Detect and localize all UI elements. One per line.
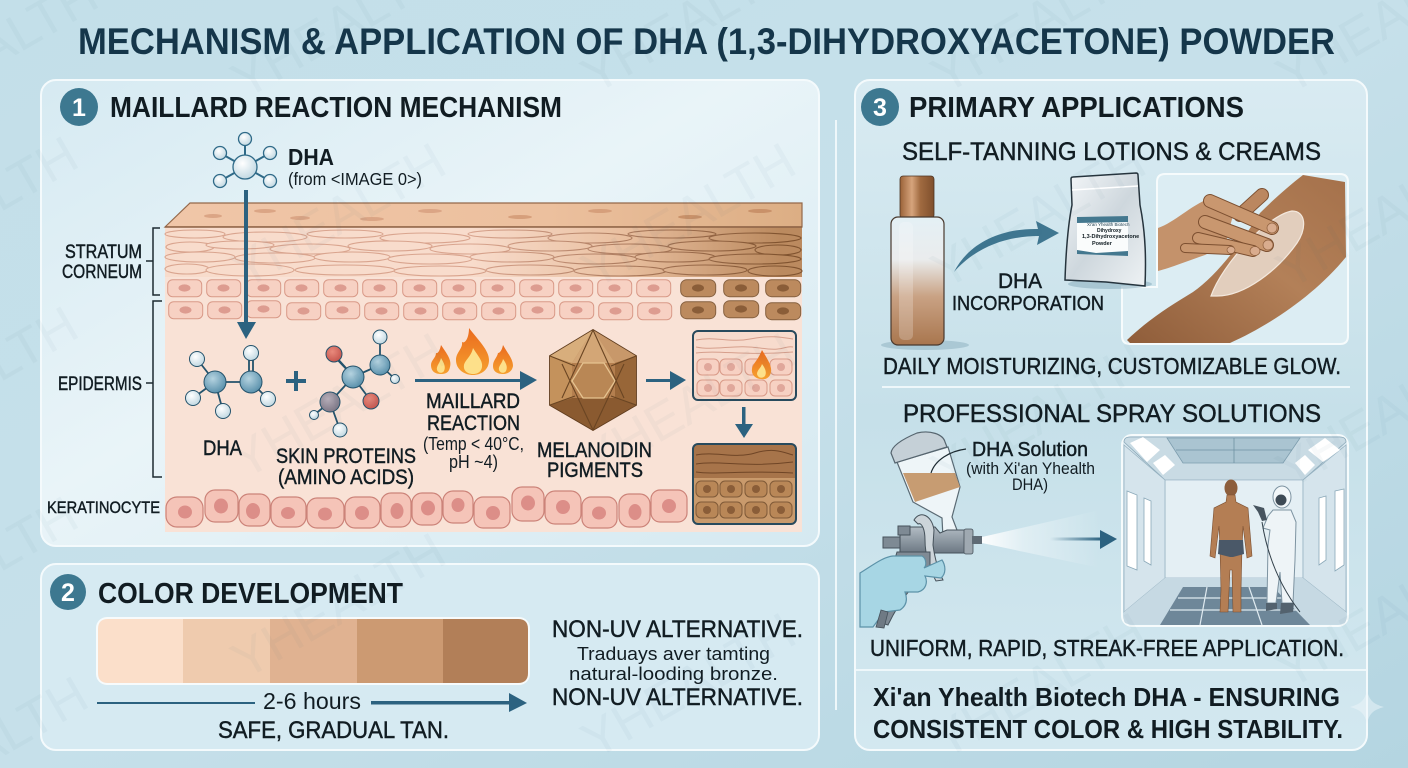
watermark pattern: YHEALTH xyxy=(572,132,805,300)
icon: sparkle xyxy=(1350,690,1384,724)
person being sprayed xyxy=(1210,480,1252,612)
label: stratum corneum with bracket: CORNEUM xyxy=(62,262,142,283)
icon: DHA molecule (top) xyxy=(214,132,276,188)
inset: tanned skin xyxy=(693,444,796,524)
icon: DHA powder pouch xyxy=(1065,173,1152,289)
leader and label: DHA solution xyxy=(931,439,1095,494)
stratum corneum layers xyxy=(165,230,802,276)
subheading: professional spray: PROFESSIONAL SPRAY SOLUTIONS xyxy=(903,400,1321,428)
caption: daily moisturizing: DAILY MOISTURIZING, CUSTOMIZABLE GLOW. xyxy=(883,353,1341,379)
plus sign xyxy=(286,371,306,391)
icon: flames xyxy=(431,328,513,375)
arrow: maillard reaction xyxy=(415,371,537,390)
heading: maillard reaction mechanism: MAILLARD REACTION MECHANISM xyxy=(110,92,562,124)
watermark pattern: YHEALTH xyxy=(572,602,805,768)
icon: DHA powder pouch: Dihydroxy xyxy=(1097,228,1122,234)
icon: DHA powder pouch: Xi'an Yhealth Biotech xyxy=(1087,222,1130,227)
inset: skin during reaction xyxy=(693,331,796,400)
watermark pattern: YHEALTH xyxy=(572,322,805,490)
arrow: spray to booth xyxy=(1050,530,1117,549)
text block: non-UV alternative: Traduays aver tamting xyxy=(577,643,770,664)
label: stratum corneum with bracket xyxy=(62,228,160,295)
label: maillard reaction conditions: MAILLARD xyxy=(426,390,520,413)
leader and label: DHA solution: (with Xi'an Yhealth xyxy=(966,460,1095,478)
section number 2 xyxy=(50,574,86,610)
section number 1 xyxy=(60,88,98,126)
section number 2: 2 xyxy=(61,579,75,607)
heading: color development: COLOR DEVELOPMENT xyxy=(98,578,403,610)
caption: safe gradual tan: SAFE, GRADUAL TAN. xyxy=(218,717,449,744)
vertical divider xyxy=(835,120,837,710)
label: stratum corneum with bracket: STRATUM xyxy=(65,242,142,263)
watermark pattern: YHEALTH xyxy=(222,322,455,490)
timeline arrow: 2-6 hours xyxy=(263,688,361,714)
arrow: to skin reaction inset xyxy=(646,371,686,390)
illustration: applying cream on arm xyxy=(1122,174,1348,344)
watermark pattern: YHEALTH xyxy=(222,132,455,300)
label: epidermis with bracket xyxy=(58,301,162,477)
watermark pattern: YHEALTH xyxy=(222,522,455,690)
label: DHA (from image 0): (from <IMAGE 0>) xyxy=(288,169,422,189)
divider xyxy=(882,386,1350,388)
footer statement xyxy=(873,682,1343,744)
label: epidermis with bracket: EPIDERMIS xyxy=(58,374,142,395)
label: skin proteins xyxy=(276,444,416,489)
label: DHA: DHA xyxy=(203,437,242,460)
timeline arrow xyxy=(97,688,527,714)
illustration: spray booth with person xyxy=(1122,435,1348,626)
icon: DHA molecule in epidermis xyxy=(186,346,276,418)
label: DHA incorporation: DHA xyxy=(998,270,1042,293)
watermark pattern: YHEALTH xyxy=(922,332,1155,500)
upper epidermis cell rows xyxy=(168,280,801,320)
label: melanoidin pigments: MELANOIDIN xyxy=(537,438,652,462)
keratinocyte cell row xyxy=(166,487,687,528)
label: melanoidin pigments xyxy=(537,438,652,482)
skin cross-section xyxy=(165,203,802,532)
panel: maillard reaction mechanism xyxy=(41,80,819,546)
subheading: self-tanning: SELF-TANNING LOTIONS & CREAMS xyxy=(902,138,1321,166)
panel: primary applications xyxy=(855,80,1384,750)
illustration: spray gun with cup xyxy=(860,432,1100,628)
label: maillard reaction conditions: pH ~4) xyxy=(449,452,498,472)
title: MECHANISM & APPLICATION OF DHA (1,3-DIHYDROXYACETONE) POWDER xyxy=(78,21,1335,62)
technician in white suit xyxy=(1253,486,1300,614)
icon: lotion bottle xyxy=(881,176,969,350)
arrow: DHA penetrates skin xyxy=(237,190,256,339)
text block: non-UV alternative xyxy=(552,616,803,711)
text block: non-UV alternative: natural-looding bronze. xyxy=(569,663,778,684)
label: maillard reaction conditions xyxy=(423,390,524,472)
section number 1: 1 xyxy=(72,94,86,122)
label: DHA incorporation xyxy=(952,270,1104,315)
arrow: down to tanned skin xyxy=(735,407,753,438)
icon: skin protein molecule xyxy=(310,330,400,437)
divider xyxy=(856,669,1366,671)
icon: melanoidin pigment polyhedron xyxy=(550,330,636,430)
label: DHA incorporation: INCORPORATION xyxy=(952,293,1104,315)
watermark pattern: YHEALTH xyxy=(922,132,1155,300)
label: keratinocyte: KERATINOCYTE xyxy=(47,498,160,517)
color swatch bar xyxy=(96,617,530,685)
label: maillard reaction conditions: REACTION xyxy=(427,412,520,435)
text block: non-UV alternative: NON-UV ALTERNATIVE. xyxy=(552,616,803,643)
text block: non-UV alternative: NON-UV ALTERNATIVE. xyxy=(552,684,803,711)
label: maillard reaction conditions: (Temp < 40°C, xyxy=(423,434,524,454)
leader and label: DHA solution: DHA Solution xyxy=(972,439,1088,461)
arrow: curved DHA incorporation xyxy=(954,221,1059,272)
heading: primary applications: PRIMARY APPLICATIONS xyxy=(909,92,1244,124)
footer statement: Xi'an Yhealth Biotech DHA - ENSURING xyxy=(873,682,1340,712)
section number 3: 3 xyxy=(873,94,887,122)
label: DHA (from image 0): DHA xyxy=(288,144,334,170)
label: DHA (from image 0) xyxy=(288,144,422,189)
leader and label: DHA solution: DHA) xyxy=(1012,476,1048,494)
label: skin proteins: SKIN PROTEINS xyxy=(276,444,416,468)
icon: DHA powder pouch: 1,3-Dihydroxyacetone xyxy=(1082,234,1139,240)
label: melanoidin pigments: PIGMENTS xyxy=(547,458,643,482)
watermark pattern: YHEALTH xyxy=(922,602,1155,768)
icon: DHA powder pouch: Powder xyxy=(1092,241,1113,247)
footer statement: CONSISTENT COLOR & HIGH STABILITY. xyxy=(873,714,1343,744)
section number 3 xyxy=(861,88,899,126)
label: skin proteins: (AMINO ACIDS) xyxy=(278,465,414,489)
panel: color development xyxy=(41,564,819,750)
caption: uniform application: UNIFORM, RAPID, STREAK-FREE APPLICATION. xyxy=(870,635,1344,661)
